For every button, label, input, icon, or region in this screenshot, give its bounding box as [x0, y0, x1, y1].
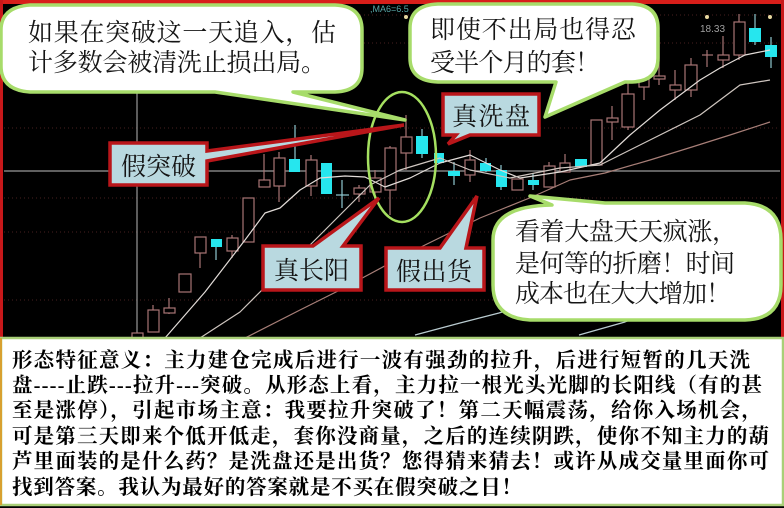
chart value labels	[370, 4, 772, 35]
chart value labels: 18.33	[700, 24, 725, 35]
callout: chasing on breakout day: 计多数会被清洗止损出局。	[28, 49, 326, 77]
callout: chasing on breakout day	[1, 5, 405, 120]
label: 真长阳	[263, 198, 379, 290]
text block: description lines: 找到答案。我认为最好的答案就是不买在假突破之日！	[12, 475, 522, 499]
label: 真洗盘	[443, 94, 539, 144]
label: 假出货: 假出货	[396, 258, 474, 286]
label: 真长阳: 真长阳	[274, 257, 349, 285]
callout: time cost: 看着大盘天天疯涨，	[515, 218, 737, 246]
frame: red chart border	[0, 0, 784, 338]
green ellipse highlight	[368, 92, 436, 222]
callout: time cost	[493, 196, 781, 320]
moving average lines	[165, 50, 770, 338]
callout: half a month trapped	[410, 4, 658, 117]
label: 假出货	[386, 196, 484, 290]
label: 假突破	[110, 125, 404, 185]
label: 真洗盘: 真洗盘	[452, 103, 530, 131]
callout: time cost: 成本也在大大增加！	[515, 280, 731, 308]
panel: pattern description	[0, 338, 783, 505]
text block: description lines: 至是涨停），引起市场主意：我要拉升突破了！第二天幅震荡，给你入场机会，	[12, 398, 762, 422]
candlestick chart	[132, 14, 777, 338]
text block: description lines: 芦里面装的是什么药？是洗盘还是出货？您得猜来猜去！或许从成交量里面你可	[12, 449, 769, 473]
text block: description lines: 可是第三天即来个低开低走，套你没商量，之后的连续阴跌，使你不知主力的葫	[12, 425, 769, 448]
callout: time cost: 是何等的折磨！时间	[515, 250, 735, 278]
text block: description lines: 盘----止跌---拉升---突破。从形态上看，主力拉一根光头光脚的长阳线（有的甚	[12, 374, 762, 397]
callout: half a month trapped: 受半个月的套！	[430, 49, 600, 77]
text block: description lines: 形态特征意义：主力建仓完成后进行一波有强劲的拉升，后进行短暂的几天洗	[12, 348, 750, 372]
label: 假突破: 假突破	[121, 153, 196, 181]
text block: description lines	[12, 348, 769, 499]
chart value labels: ,MA6=6.5	[370, 4, 409, 14]
callout: chasing on breakout day: 如果在突破这一天追入，估	[28, 19, 336, 47]
callout: half a month trapped: 即使不出局也得忍	[430, 16, 637, 44]
